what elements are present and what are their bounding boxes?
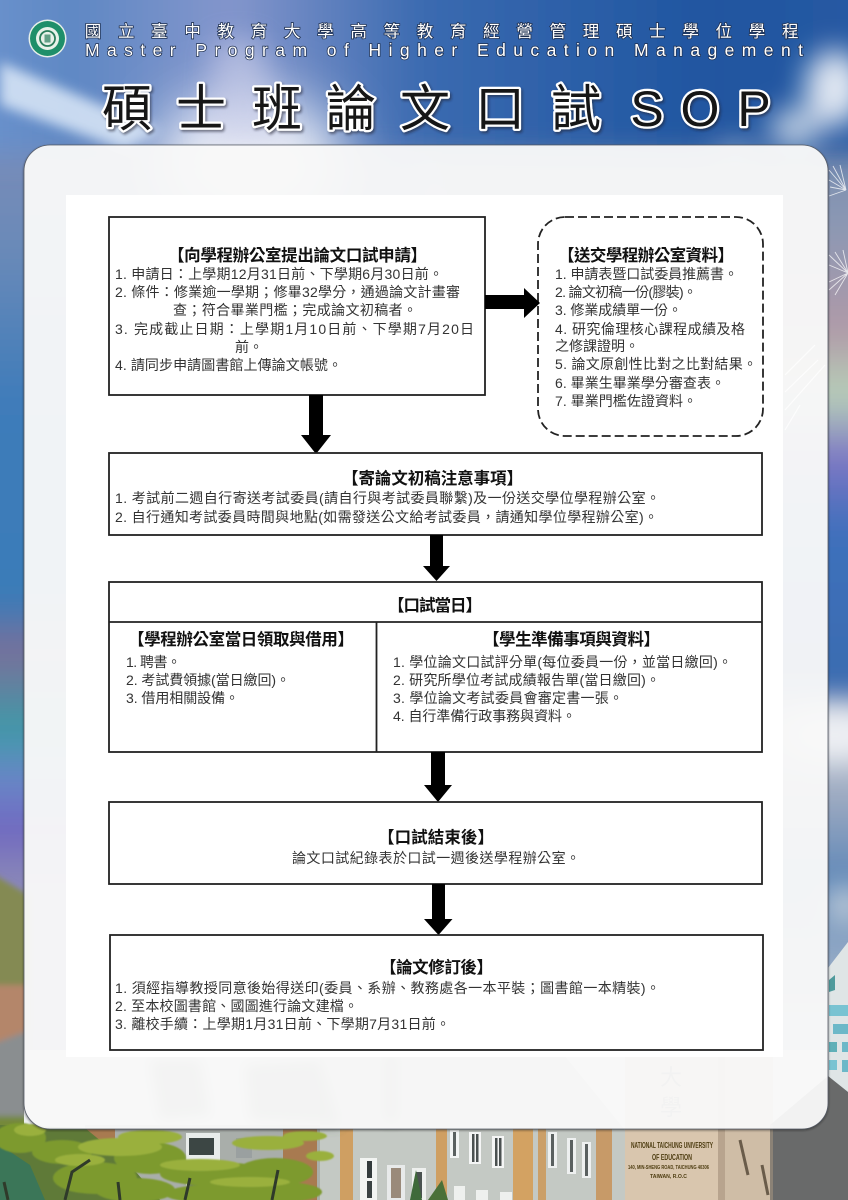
office pickup column: 3. 借用相關設備。 [126, 690, 239, 706]
right building [828, 942, 848, 1092]
box: after thesis revision: 2. 至本校圖書館、國圖進行論文建檔。 [115, 998, 358, 1014]
building windows [186, 1130, 591, 1200]
header logo [28, 20, 66, 58]
box: thesis defense application: 3. 完成截止日期：上學期1月10日前、下學期7月20日 [115, 321, 474, 337]
dashed box: documents to submit: 【送交學程辦公室資料】 [558, 245, 734, 265]
box: draft submission notes [109, 453, 762, 535]
clouds at upper right [713, 50, 848, 158]
dashed box: documents to submit: 2. 論文初稿一份(膠裝)。 [555, 284, 697, 300]
translucent white panel [24, 145, 828, 1129]
box: after the defense: 【口試結束後】 [378, 827, 494, 847]
stone monument: 大 [660, 1065, 682, 1090]
monument inscription: 140, MIN-SHENG ROAD, TAICHUNG 40306 [628, 1165, 709, 1171]
office pickup column: 【學程辦公室當日領取與借用】 [128, 629, 354, 649]
white content area [66, 195, 783, 1057]
dashed box: documents to submit: 4. 研究倫理核心課程成績及格 [555, 321, 745, 337]
student preparation column: 3. 學位論文考試委員會審定書一張。 [393, 690, 623, 706]
box: thesis defense application [109, 217, 485, 395]
dashed box: documents to submit: 5. 論文原創性比對之比對結果。 [555, 356, 757, 372]
box: after thesis revision: 1. 須經指導教授同意後始得送印(委員、系辦、教務處各一本平裝；圖書館一本精裝)。 [115, 980, 660, 996]
box: draft submission notes: 1. 考試前二週自行寄送考試委員(請自行與考試委員聯繫)及一份送交學位學程辦公室。 [115, 490, 660, 506]
student preparation column: 2. 研究所學位考試成績報告單(當日繳回)。 [393, 672, 660, 688]
main campus building [24, 1050, 828, 1200]
box: thesis defense application: 1. 申請日：上學期12月31日前、下學期6月30日前。 [115, 266, 443, 282]
monument inscription [628, 1141, 713, 1180]
dashed box: documents to submit: 7. 畢業門檻佐證資料。 [555, 393, 697, 409]
dashed box: documents to submit: 3. 修業成績單一份。 [555, 302, 682, 318]
box: thesis defense application: 查；符合畢業門檻；完成論文初稿者。 [173, 302, 417, 318]
box: thesis defense application: 【向學程辦公室提出論文口試申請】 [168, 245, 427, 265]
office pickup column [126, 629, 354, 706]
dashed box: documents to submit: 1. 申請表暨口試委員推薦書。 [555, 266, 738, 282]
arrow: application to draft notes [301, 395, 331, 454]
left palm, brick and stone strip [0, 872, 40, 1146]
box: after thesis revision [110, 935, 763, 1050]
header institution name: Master Program of Higher Education Management [85, 40, 803, 60]
dashed box: documents to submit: 之修課證明。 [555, 338, 639, 354]
arrow: defense day to after defense [424, 752, 452, 802]
student preparation column [393, 629, 732, 724]
student preparation column: 1. 學位論文口試評分單(每位委員一份，並當日繳回)。 [393, 654, 732, 670]
header institution name [85, 22, 803, 60]
monument inscription: OF EDUCATION [652, 1153, 692, 1162]
box: after the defense [109, 802, 762, 884]
box: defense day [109, 582, 762, 752]
palm shadow behind the panel [150, 1055, 397, 1125]
box: thesis defense application: 4. 請同步申請圖書館上傳論文帳號。 [115, 357, 342, 373]
monument inscription: NATIONAL TAICHUNG UNIVERSITY [631, 1141, 713, 1150]
arrow: application to documents [485, 288, 540, 318]
student preparation column: 4. 自行準備行政事務與資料。 [393, 708, 576, 724]
office pickup column: 2. 考試費領據(當日繳回)。 [126, 672, 290, 688]
clouds at lower right [785, 709, 848, 923]
box: thesis defense application: 前。 [235, 339, 263, 355]
arrow: after defense to revision [424, 884, 452, 935]
dashed box: documents to submit [538, 217, 763, 436]
header institution name: 國立臺中教育大學高等教育經營管理碩士學位學程 [85, 22, 798, 41]
monument inscription: TAIWAN, R.O.C [650, 1174, 687, 1180]
stone monument [625, 1050, 848, 1200]
box: draft submission notes: 【寄論文初稿注意事項】 [342, 468, 523, 488]
box: after the defense: 論文口試紀錄表於口試一週後送學程辦公室。 [292, 850, 580, 866]
title: 碩士班論文口試SOP [102, 81, 771, 137]
dandelion sparks at right [829, 165, 848, 295]
box: thesis defense application: 2. 條件：修業逾一學期；修畢32學分，通過論文計畫審 [115, 284, 460, 300]
foreground trees [0, 1123, 448, 1200]
defense day heading: 【口試當日】 [388, 595, 482, 615]
arrow: draft notes to defense day [423, 535, 450, 581]
firework traces visible through the panel [785, 345, 825, 430]
student preparation column: 【學生準備事項與資料】 [483, 629, 660, 649]
box: after thesis revision: 3. 離校手續：上學期1月31日前、下學期7月31日前。 [115, 1016, 450, 1032]
stone monument: 學 [660, 1095, 682, 1120]
box: draft submission notes: 2. 自行通知考試委員時間與地點(如需發送公文給考試委員，請通知學位學程辦公室)。 [115, 509, 658, 525]
box: after thesis revision: 【論文修訂後】 [380, 957, 493, 977]
dashed box: documents to submit: 6. 畢業生畢業學分審查表。 [555, 375, 725, 391]
office pickup column: 1. 聘書。 [126, 654, 181, 670]
